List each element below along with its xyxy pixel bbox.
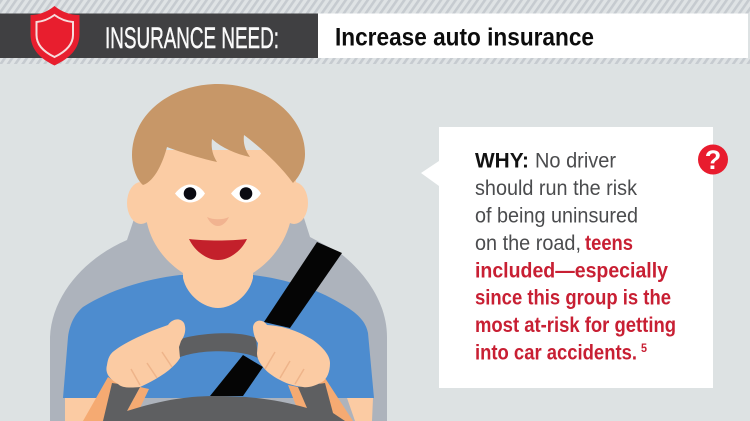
steering wheel lower bbox=[103, 383, 345, 421]
car seat bbox=[50, 215, 387, 421]
callout text: of being uninsured bbox=[475, 204, 638, 228]
callout text: most at-risk for getting bbox=[475, 314, 676, 337]
lower arm skin bbox=[65, 398, 373, 421]
seat belt upper bbox=[264, 242, 342, 328]
icon: question mark: ? bbox=[705, 145, 721, 175]
left hand bbox=[106, 319, 185, 388]
callout panel bbox=[421, 127, 713, 388]
header label panel bbox=[0, 14, 318, 58]
nose bbox=[207, 217, 229, 226]
why label: WHY: bbox=[475, 150, 529, 172]
callout text: should run the risk bbox=[475, 177, 637, 200]
header title panel bbox=[318, 14, 748, 58]
callout text: No driver bbox=[535, 150, 616, 172]
callout text bbox=[475, 150, 676, 364]
eyes bbox=[175, 184, 261, 202]
header bar bbox=[0, 14, 748, 58]
callout text: 5 bbox=[641, 343, 648, 355]
callout text: since this group is the bbox=[475, 286, 671, 310]
heading: increase auto insurance: Increase auto insurance bbox=[335, 24, 594, 52]
mouth bbox=[189, 239, 247, 260]
illustration: teen driver bbox=[50, 84, 387, 421]
icon: question mark bbox=[698, 144, 728, 175]
hair bbox=[132, 84, 305, 185]
callout text: into car accidents. bbox=[475, 342, 637, 364]
forearms bbox=[83, 377, 353, 421]
knuckles bbox=[131, 352, 304, 385]
callout text: on the road, bbox=[475, 232, 581, 255]
heading: insurance need: INSURANCE NEED: bbox=[105, 22, 279, 55]
callout text: included—especially bbox=[475, 260, 668, 282]
seat belt lower bbox=[210, 355, 263, 396]
icon: shield bbox=[30, 6, 80, 66]
steering wheel top bbox=[178, 333, 258, 358]
ears bbox=[127, 182, 155, 224]
right hand bbox=[253, 321, 330, 387]
face and neck bbox=[140, 150, 296, 308]
shirt bbox=[63, 275, 374, 398]
callout text: teens bbox=[585, 232, 633, 255]
